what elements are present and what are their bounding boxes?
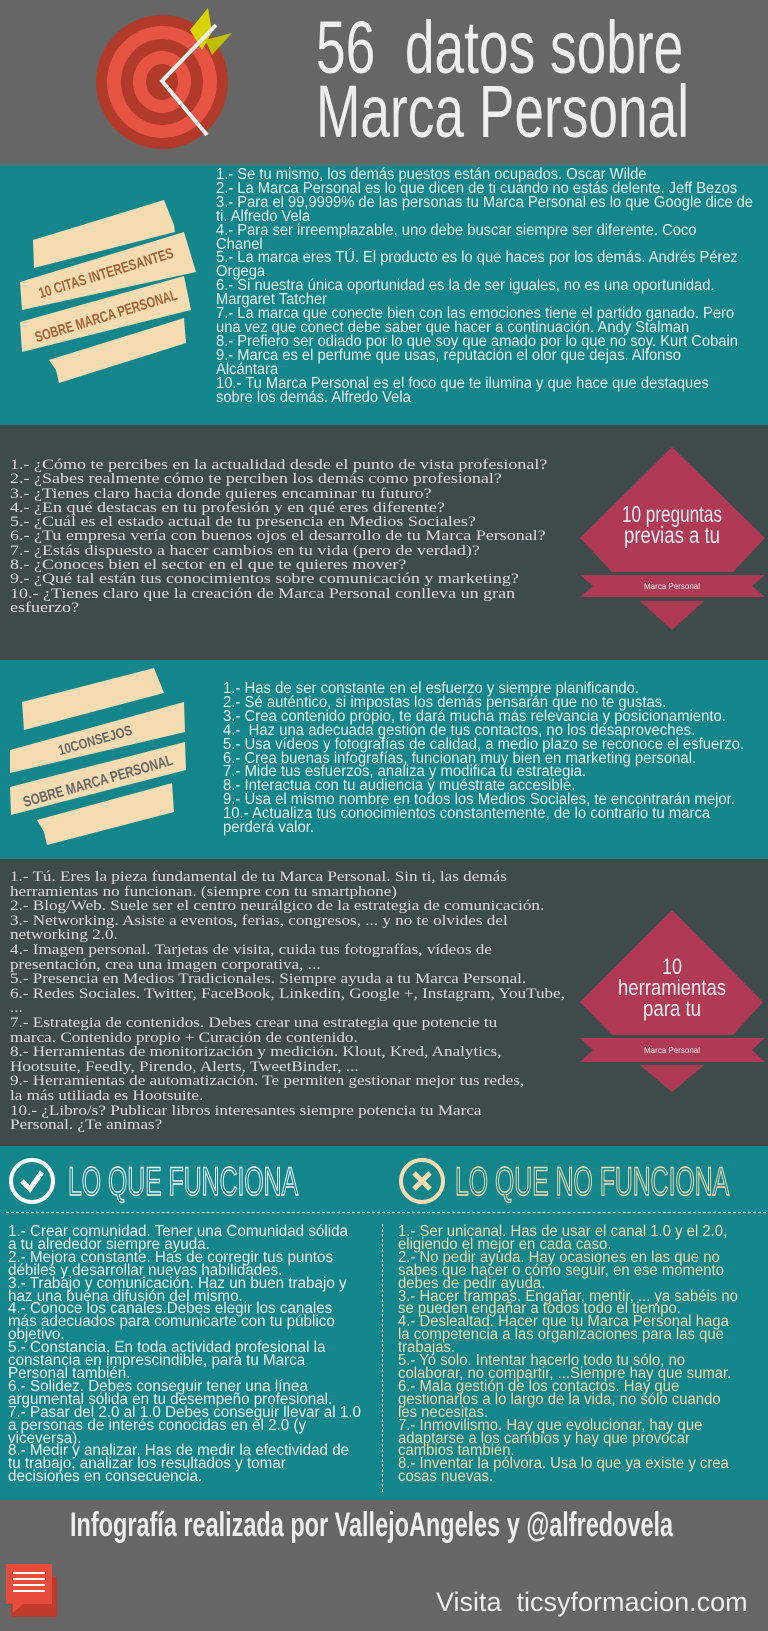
diamond badge: 10 herramientas: Marca Personal bbox=[644, 1046, 700, 1055]
diamond badge: 10 herramientas: herramientas bbox=[618, 975, 726, 1000]
panel: 10 herramientas bbox=[0, 859, 768, 1146]
panel: 10 consejos bbox=[0, 660, 768, 859]
credits text: Infografía realizada por VallejoAngeles y @alfredovela bbox=[70, 1506, 673, 1544]
ribbon banner: 10 citas bbox=[20, 200, 196, 383]
icon: x circle bbox=[399, 1158, 445, 1204]
title: 56 datos sobre Marca Personal bbox=[316, 6, 689, 153]
header bbox=[0, 0, 768, 165]
panel: 10 preguntas bbox=[0, 425, 768, 660]
ribbon banner: 10 consejos: 10CONSEJOS bbox=[56, 722, 134, 758]
ribbon banner: 10 consejos bbox=[10, 668, 186, 845]
diamond badge: 10 herramientas bbox=[580, 910, 765, 1092]
questions list: 1.- ¿Cómo te percibes en la actualidad desde el punto de vista profesional? 2.- ¿Sabes realmente cómo te perciben los demás como profesional? 3.- ¿Tienes claro hacia donde quieres encaminar tu futuro? 4.- ¿En qué destacas en tu profesión y en qué eres diferente? 5.- ¿Cuál es el estado actual de tu presencia en Medios Sociales? 6.- ¿Tu empresa vería con buenos ojos el desarrollo de tu Marca Personal? 7.- ¿Estás dispuesto a hacer cambios en tu vida (pero de verdad)? 8.- ¿Conoces bien el sector en el que te quieres mover? 9.- ¿Qué tal están tus conocimientos sobre comunicación y marketing? 10.- ¿Tienes claro que la creación de Marca Personal conlleva un gran esfuerzo? bbox=[10, 457, 547, 616]
quotes list: 1.- Se tu mismo, los demás puestos están ocupados. Oscar Wilde 2.- La Marca Personal es lo que dicen de ti cuando no estás delente. Jeff Bezos 3.- Para el 99,9999% de las personas tu Marca Personal es lo que Google dice de ti. Alfredo Vela 4.- Para ser irreemplazable, uno debe buscar siempre ser diferente. Coco Chanel 5.- La marca eres TÚ. El producto es lo que haces por los demás. Andrés Pérez Orgega 6.- Si nuestra única oportunidad es la de ser iguales, no es una oportunidad. Margaret Tatcher 7.- La marca que conecte bien con las emociones tiene el partido ganado. Pero una vez que conect debe saber que hacer a continuación. Andy Stalman 8.- Prefiero ser odiado por lo que soy que amado por lo que no soy. Kurt Cobain 9.- Marca es el perfume que usas, reputación el olor que dejas. Alfonso Alcántara 10.- Tu Marca Personal es el foco que te ilumina y que hace que destaques sobre los demás. Alfredo Vela bbox=[216, 166, 753, 406]
panel: 10 citas bbox=[0, 165, 768, 425]
icon: check circle bbox=[9, 1158, 55, 1204]
icon: target with arrow bbox=[96, 8, 232, 149]
diamond badge: 10 herramientas: 10 bbox=[662, 954, 682, 979]
icon: red chat bbox=[6, 1564, 57, 1617]
heading: lo que funciona: LO QUE FUNCIONA bbox=[68, 1160, 298, 1204]
heading: lo que no funciona: LO QUE NO FUNCIONA bbox=[455, 1160, 729, 1204]
diamond badge: 10 preguntas: 10 preguntas bbox=[622, 501, 722, 527]
footer bbox=[0, 1500, 768, 1631]
panel: lo que funciona / no funciona bbox=[0, 1146, 768, 1500]
diamond badge: 10 preguntas bbox=[580, 447, 765, 630]
list: lo que no funciona: 1.- Ser unicanal. Has de usar el canal 1.0 y el 2.0, eligiendo el mejor en cada caso. 2.- No pedir ayuda. Hay ocasiones en las que no sabes que hacer o cómo seguir, en ese momento debes de pedir ayuda. 3.- Hacer trampas. Engañar, mentir, ... ya sabéis no se pueden engañar a todos todo el tiempo. 4.- Deslealtad. Hacer que tu Marca Personal haga la competencia a las organizaciones para las que trabajas. 5.- Yo solo. Intentar hacerlo todo tu sólo, no colaborar, no compartir, ...Siempre hay que sumar. 6.- Mala gestión de los contactos. Hay que gestionarlos a lo largo de la vida, no sólo cuando les necesitas. 7.- Inmovilismo. Hay que evolucionar, hay que adaptarse a los cambios y hay que provocar cambios también. 8.- Inventar la pólvora. Usa lo que ya existe y crea cosas nuevas. bbox=[398, 1223, 738, 1485]
diamond badge: 10 herramientas: para tu bbox=[643, 996, 701, 1021]
diamond badge: 10 preguntas: Marca Personal bbox=[644, 582, 700, 591]
tools list: 1.- Tú. Eres la pieza fundamental de tu Marca Personal. Sin ti, las demás herramientas no funcionan. (siempre con tu smartphone) 2.- Blog/Web. Suele ser el centro neurálgico de la estrategia de comunicación. 3.- Networking. Asiste a eventos, ferias, congresos, ... y no te olvides del networking 2.0. 4.- Imagen personal. Tarjetas de visita, cuida tus fotografías, vídeos de presentación, crea una imagen corporativa, ... 5.- Presencia en Medios Tradicionales. Siempre ayuda a tu Marca Personal. 6.- Redes Sociales. Twitter, FaceBook, Linkedin, Google +, Instagram, YouTube, ... 7.- Estrategia de contenidos. Debes crear una estrategia que potencie tu marca. Contenido propio + Curación de contenido. 8.- Herramientas de monitorización y medición. Klout, Kred, Analytics, Hootsuite, Feedly, Pirendo, Alerts, TweetBinder, ... 9.- Herramientas de automatización. Te permiten gestionar mejor tus redes, la más utiliada es Hootsuite. 10.- ¿Libro/s? Publicar libros interesantes siempre potencia tu Marca Personal. ¿Te animas? bbox=[10, 869, 565, 1133]
tips list: 1.- Has de ser constante en el esfuerzo y siempre planificando. 2.- Sé auténtico, si impostas los demás pensarán que no te gustas. 3.- Crea contenido propio, te dará mucha más relevancia y posicionamiento. 4.- Haz una adecuada gestión de tus contactos, no los desaproveches. 5.- Usa vídeos y fotografías de calidad, a medio plazo se reconoce el esfuerzo. 6.- Crea buenas infografías, funcionan muy bien en marketing personal. 7.- Mide tus esfuerzos, analiza y modifica tu estrategia. 8.- Interactua con tu audiencia y muéstrate accesible. 9.- Usa el mismo nombre en todos los Medios Sociales, te encontrarán mejor. 10.- Actualiza tus conocimientos constantemente, de lo contrario tu marca perderá valor. bbox=[223, 680, 744, 836]
list: lo que funciona: 1.- Crear comunidad. Tener una Comunidad sólida a tu alrededor siempre ayuda. 2.- Mejora constante. Has de corregir tus puntos débiles y desarrollar nuevas habilidades. 3.- Trabajo y comunicación. Haz un buen trabajo y haz una buena difusión del mismo. 4.- Conoce los canales.Debes elegir los canales más adecuados para comunicarte con tu público objetivo. 5.- Constancia. En toda actividad profesional la constancia en imprescindible, para tu Marca Personal también. 6.- Solidez. Debes conseguir tener una línea argumental sólida en tu desempeño profesional. 7.- Pasar del 2.0 al 1.0 Debes conseguir llevar al 1.0 a personas de interés conocidas en el 2.0 (y viceversa). 8.- Medir y analizar. Has de medir la efectividad de tu trabajo, analizar los resultados y tomar decisiones en consecuencia. bbox=[8, 1223, 361, 1485]
diamond badge: 10 preguntas: previas a tu bbox=[624, 522, 720, 548]
website text: Visita ticsyformacion.com bbox=[436, 1587, 748, 1617]
